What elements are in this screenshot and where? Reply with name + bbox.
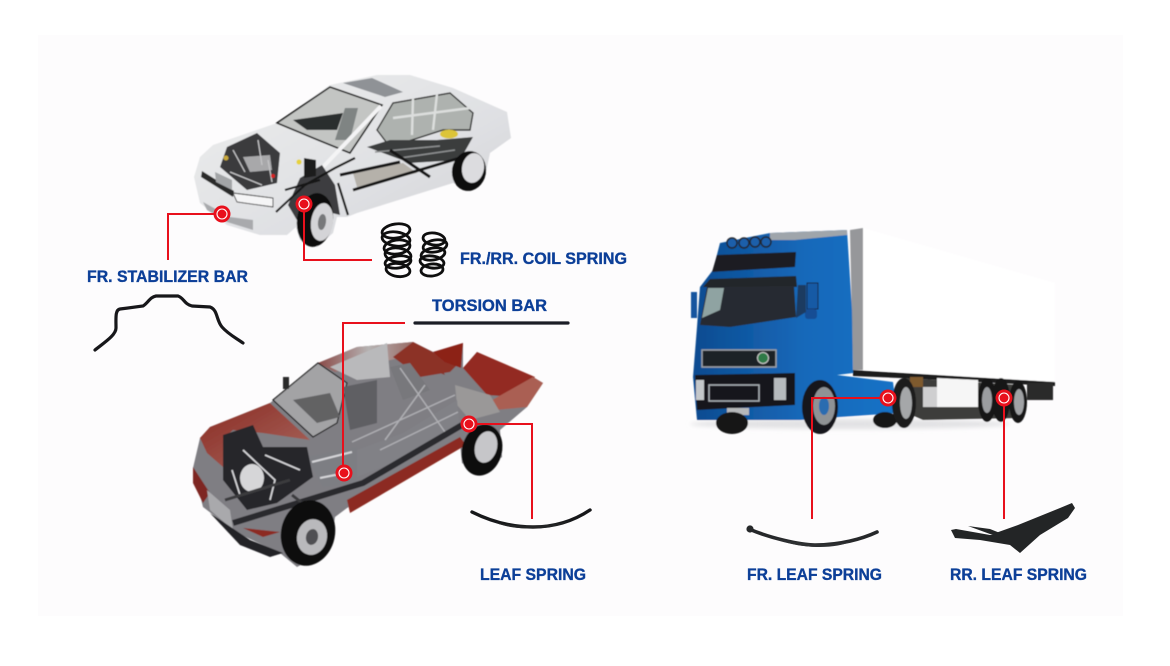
pickup front bumper chrome [207, 490, 233, 530]
pickup floor [357, 400, 460, 477]
trailer grey box [923, 387, 937, 407]
marker: leaf spring [460, 416, 478, 432]
cab windshield [700, 286, 796, 327]
FR. leaf spring part [746, 525, 877, 547]
pickup roof [318, 342, 445, 375]
marker: stabilizer bar [214, 206, 230, 222]
pickup body silhouette [193, 342, 543, 567]
trailer front strip [850, 228, 863, 370]
sedan suspension tangle [288, 165, 340, 222]
cab side window [796, 285, 806, 318]
pickup tailgate panel [433, 343, 463, 368]
pickup engine [223, 425, 313, 510]
cab roof deflector [770, 230, 847, 240]
truck ground shadow [690, 419, 1010, 429]
license plate [727, 408, 749, 415]
sedan floor chassis [367, 137, 473, 163]
pickup frame [233, 425, 462, 523]
sedan sill and bars [340, 150, 463, 190]
pickup transparent bed box [455, 385, 500, 420]
trailer side box [937, 378, 978, 407]
trailer underside [853, 370, 1055, 386]
sedan body [194, 75, 511, 247]
label: RR. leaf spring: RR. LEAF SPRING [950, 566, 1087, 584]
pickup bed side [478, 377, 543, 410]
front bumper [695, 373, 795, 410]
pickup bed [463, 352, 535, 397]
pickup front seat [343, 380, 377, 430]
sedan sunroof [343, 78, 403, 97]
pickup roof rear red stripe [393, 342, 457, 377]
pickup windshield [273, 363, 347, 437]
sedan engine coloured parts [224, 156, 302, 178]
sedan side cabin [377, 93, 473, 147]
FR. leaf spring stack [772, 537, 852, 547]
pickup truck cutaway [193, 342, 543, 571]
sedan headlight [233, 193, 273, 207]
sedan engine bay [220, 133, 280, 190]
side mirror [807, 283, 818, 309]
marker: coil spring [296, 196, 312, 212]
pickup front bumper red [193, 467, 210, 503]
trailer rear bumper [1027, 383, 1053, 400]
sedan yellow reservoir [440, 130, 458, 138]
sedan cabin pillars [393, 94, 470, 135]
grille badge [758, 352, 768, 364]
front wheel [802, 380, 838, 434]
RR. leaf spring upper leaf [968, 526, 1005, 535]
label: FR. stabilizer bar: FR. STABILIZER BAR [87, 268, 248, 286]
pickup transmission [307, 447, 357, 487]
semi truck [690, 228, 1055, 434]
sedan cutaway car [194, 75, 511, 249]
sedan lower bumper vent [203, 202, 253, 230]
label: leaf spring: LEAF SPRING [480, 566, 586, 584]
pickup red sill [347, 437, 466, 513]
trailer box [863, 228, 1055, 382]
marker: truck rear leaf spring [996, 390, 1012, 406]
sedan floor pan [353, 163, 417, 187]
pickup rear window [330, 343, 390, 380]
front-left tyre [716, 412, 748, 434]
FR. leaf spring eye [746, 525, 754, 533]
headlights [696, 380, 704, 400]
RR. leaf spring part [951, 503, 1075, 553]
light bar [727, 237, 771, 248]
marker: truck front leaf spring [880, 390, 896, 406]
sedan grille [201, 171, 234, 197]
FR. stabilizer bar part [95, 296, 243, 350]
cab sun visor [712, 252, 796, 272]
label: FR. leaf spring: FR. LEAF SPRING [747, 566, 882, 584]
pickup hood [200, 403, 310, 467]
front grille [702, 350, 776, 367]
chassis brown part [910, 377, 923, 387]
pickup engine block [240, 464, 264, 492]
leaf spring part [472, 510, 590, 529]
pickup engine pipes [232, 450, 300, 500]
coil spring right [419, 232, 448, 277]
label: coil spring: FR./RR. COIL SPRING [460, 250, 627, 268]
pickup dashboard [293, 393, 340, 423]
sedan seat through windshield [335, 108, 358, 140]
pickup rear wheel [456, 420, 508, 480]
tractor rear wheels [873, 412, 897, 428]
pickup front wheel [275, 495, 341, 571]
sedan rear wheel [449, 148, 489, 194]
sedan front wheel [293, 191, 337, 249]
torsion bar part [415, 321, 568, 325]
coil spring left [381, 222, 412, 278]
sedan windshield [277, 87, 382, 153]
leaf spring stack [495, 520, 570, 529]
label: torsion bar: TORSION BAR [432, 297, 547, 315]
marker: torsion bar [336, 464, 352, 482]
sedan dashboard [293, 113, 343, 130]
pickup rear seat [390, 363, 430, 400]
pickup mirror [283, 377, 289, 389]
red leader lines [168, 204, 1004, 519]
pickup lower bumper [210, 513, 283, 557]
sedan A-pillar [323, 106, 381, 167]
trailer wheels [978, 378, 996, 422]
truck cab [693, 230, 897, 420]
